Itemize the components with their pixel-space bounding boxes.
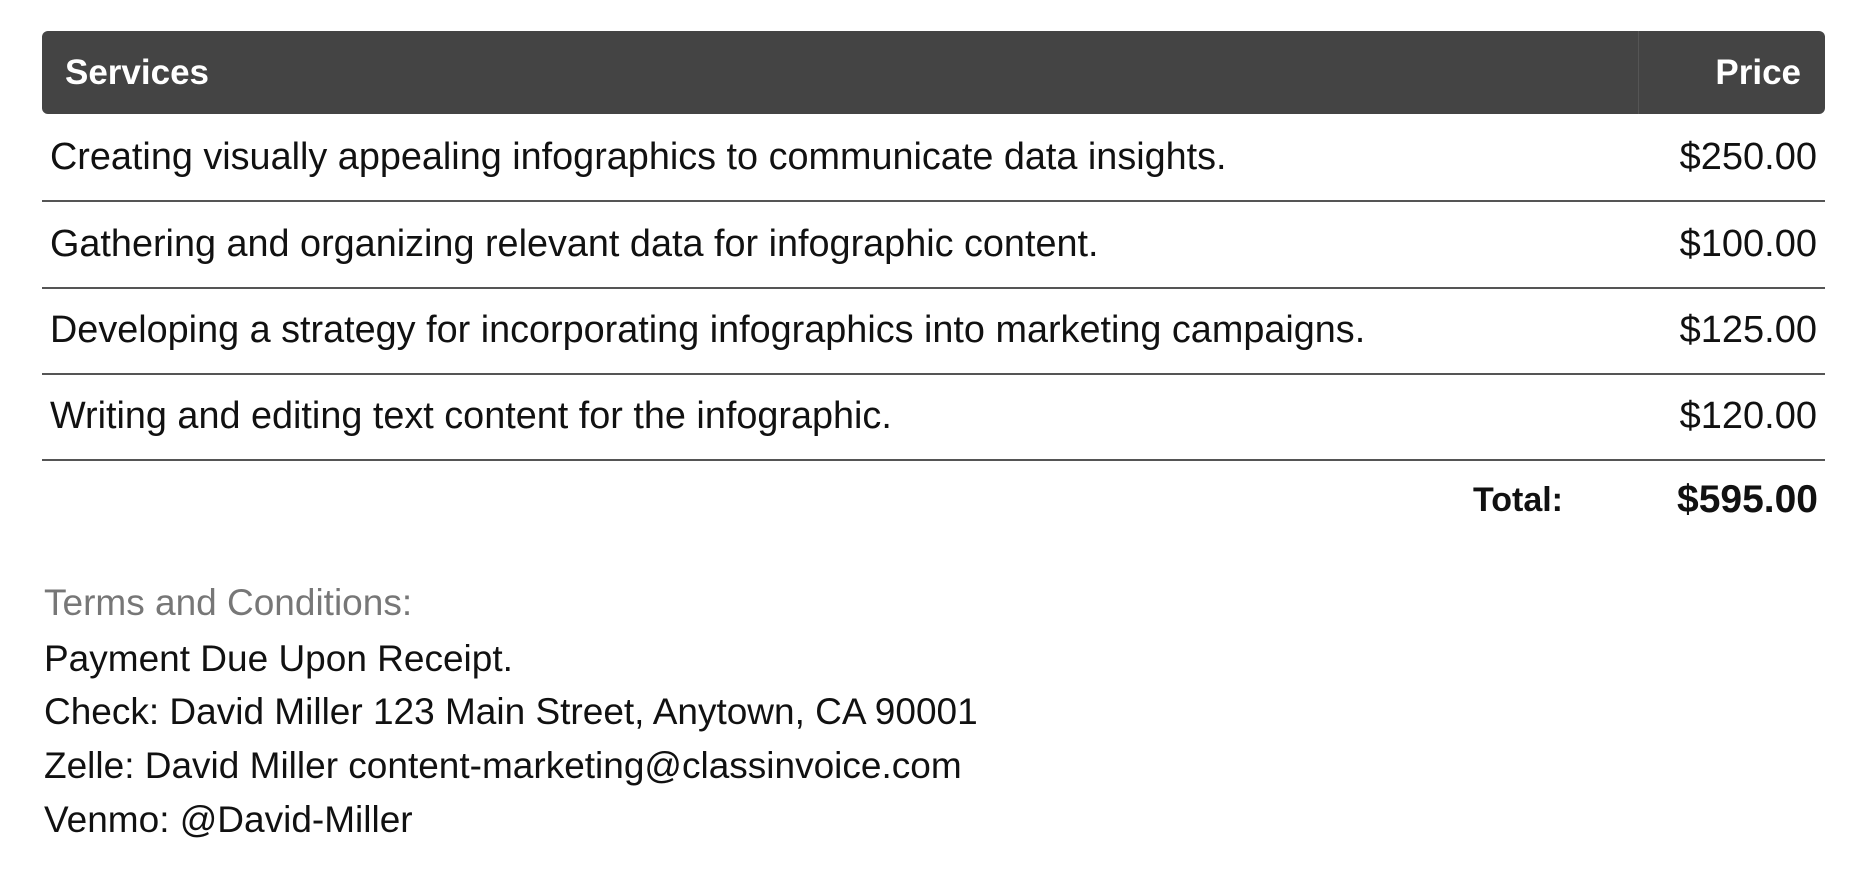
row 4: Writing and editing text content for the infographic. <box>50 395 892 437</box>
row 4 <box>42 373 1825 461</box>
header: price: Price <box>1715 53 1801 92</box>
row 2: $100.00 <box>1680 223 1817 265</box>
row 2: Gathering and organizing relevant data for infographic content. <box>50 223 1098 265</box>
row 3 <box>42 287 1825 375</box>
terms text: Check: David Miller 123 Main Street, Anytown, CA 90001 <box>44 691 978 732</box>
total <box>1473 478 1818 521</box>
terms text: Venmo: @David-Miller <box>44 799 413 840</box>
row 1 <box>42 114 1825 202</box>
total: Total: <box>1473 481 1563 519</box>
row 1: Creating visually appealing infographics to communicate data insights. <box>50 136 1227 178</box>
row 3: Developing a strategy for incorporating infographics into marketing campaigns. <box>50 309 1365 351</box>
row 2 <box>42 201 1825 289</box>
row 1: $250.00 <box>1680 136 1817 178</box>
terms text: Zelle: David Miller content-marketing@classinvoice.com <box>44 745 962 786</box>
header: services: Services <box>65 53 209 92</box>
row 4: $120.00 <box>1680 395 1817 437</box>
total: $595.00 <box>1677 478 1818 521</box>
row 3: $125.00 <box>1680 309 1817 351</box>
terms text <box>44 638 978 840</box>
table header <box>42 31 1825 114</box>
terms heading: Terms and Conditions: <box>44 582 412 623</box>
terms text: Payment Due Upon Receipt. <box>44 638 513 679</box>
